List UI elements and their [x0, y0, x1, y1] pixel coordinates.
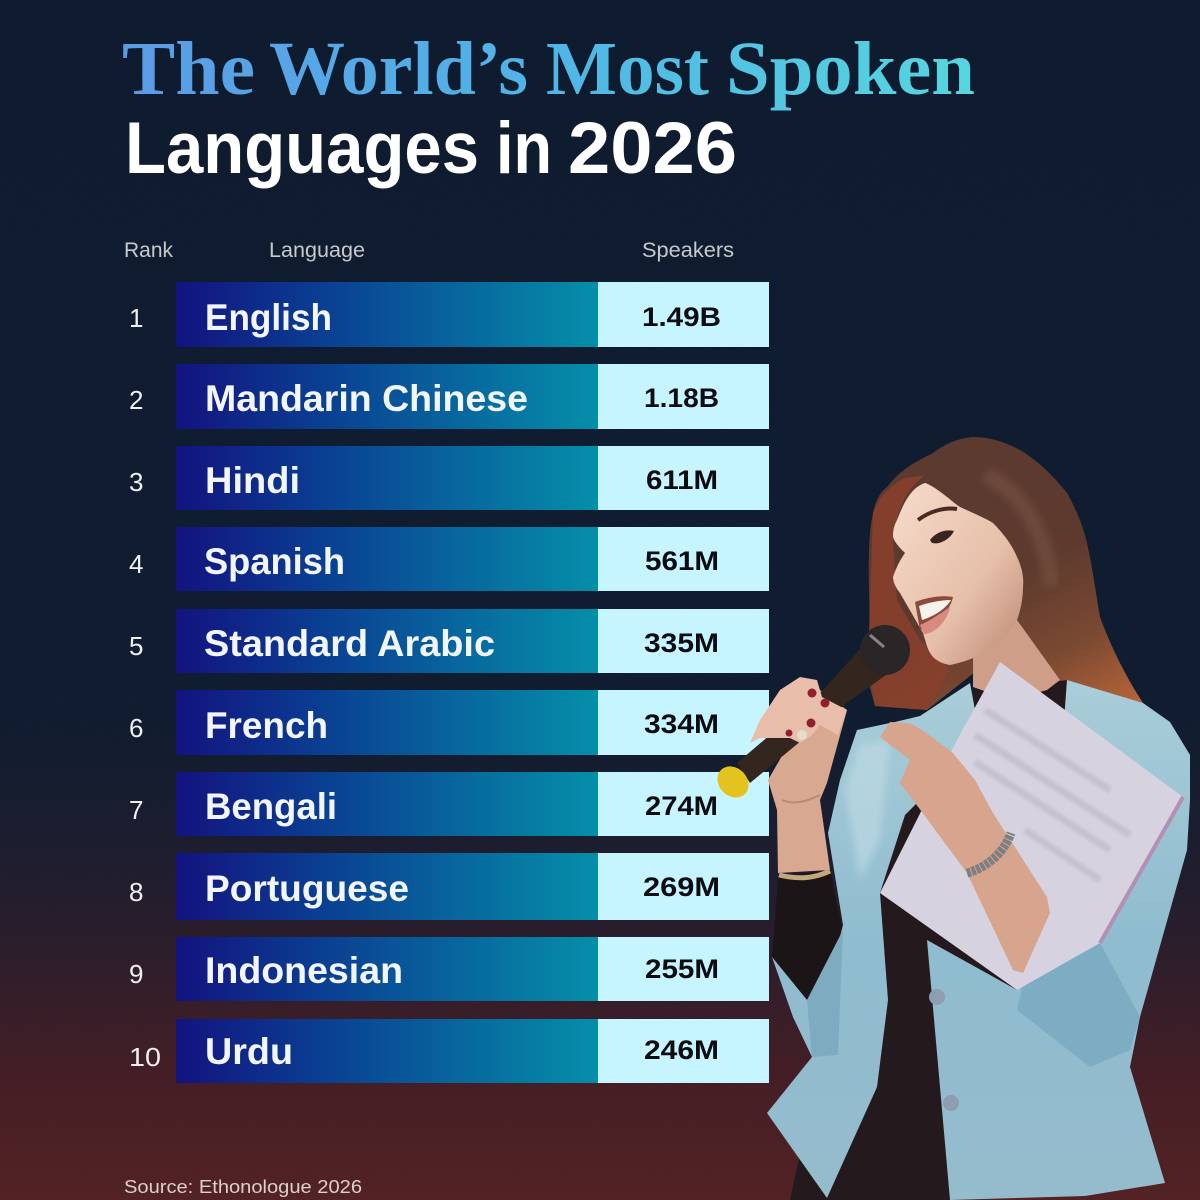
notebook handwriting [975, 710, 1130, 880]
source note: Source: Ethonologue 2026 [124, 1177, 362, 1197]
row 3: Hindi: Hindi [205, 460, 300, 501]
row 4: Spanish: 4 [129, 549, 143, 579]
table header: Speakers [642, 239, 734, 262]
row 5: Standard Arabic [129, 609, 769, 673]
row 1: English: 1 [129, 303, 143, 333]
title [122, 27, 975, 189]
row 2: Mandarin Chinese: 2 [129, 385, 143, 415]
right hand and forearm [880, 722, 1050, 973]
row 6: French [129, 690, 769, 755]
right wrist bracelet [967, 833, 1011, 873]
row 6: French: French [205, 705, 328, 746]
row 7: Bengali: 7 [129, 795, 143, 825]
row 10: Urdu: Urdu [205, 1031, 293, 1072]
row 9: Indonesian: 9 [129, 959, 143, 989]
row 4: Spanish: 561M [645, 546, 719, 576]
row 10: Urdu: 10 [129, 1042, 161, 1072]
row 1: English: 1.49B [642, 302, 721, 332]
row 9: Indonesian: 255M [645, 954, 719, 984]
title: in [496, 108, 552, 189]
row 3: Hindi: 3 [129, 467, 143, 497]
row 8: Portuguese: 269M [643, 872, 720, 902]
left lapel highlight [845, 740, 890, 880]
row 2: Mandarin Chinese: 1.18B [644, 383, 719, 413]
jacket left panel [767, 683, 975, 1198]
jacket right panel [927, 680, 1190, 1200]
title: The [122, 27, 255, 111]
right sleeve shade [1017, 913, 1140, 1067]
jacket buttons [929, 989, 959, 1111]
row 7: Bengali [129, 772, 769, 836]
notebook [880, 662, 1183, 990]
title: 2026 [568, 108, 737, 189]
row 5: Standard Arabic: 5 [129, 631, 143, 661]
row 8: Portuguese [129, 853, 769, 920]
left sleeve cuff shade [807, 930, 843, 1057]
table header [124, 239, 734, 262]
row 5: Standard Arabic: 335M [644, 628, 719, 658]
left black sleeve [772, 870, 843, 1000]
face [893, 483, 1023, 665]
title: Most [546, 27, 709, 111]
row 8: Portuguese: Portuguese [205, 868, 409, 909]
row 1: English [129, 282, 769, 347]
eye and brow [918, 508, 957, 543]
row 2: Mandarin Chinese [129, 364, 769, 429]
title: Languages [125, 108, 479, 189]
hair left side [868, 475, 950, 710]
row 8: Portuguese: 8 [129, 877, 143, 907]
row 4: Spanish [129, 527, 769, 591]
woman speaking with microphone and notebook [711, 437, 1190, 1200]
black top [790, 680, 1068, 1200]
table header: Language [269, 239, 365, 262]
microphone [711, 625, 910, 804]
row 10: Urdu: 246M [644, 1035, 719, 1065]
row 2: Mandarin Chinese: Mandarin Chinese [205, 378, 528, 419]
row 7: Bengali: Bengali [205, 786, 337, 827]
notebook spiral edge [1100, 797, 1183, 943]
row 5: Standard Arabic: Standard Arabic [204, 623, 495, 664]
table header: Rank [124, 239, 173, 262]
wrist crease [782, 795, 820, 803]
row 1: English: English [205, 297, 332, 338]
nails [786, 688, 830, 740]
title: Spoken [726, 27, 975, 111]
hair [868, 437, 1143, 710]
left wrist bracelet [779, 871, 830, 878]
row 10: Urdu [129, 1019, 769, 1083]
title: World’s [269, 27, 528, 111]
left fingers over microphone [750, 677, 847, 743]
mouth [915, 596, 953, 634]
row 9: Indonesian [129, 937, 769, 1001]
hair sheen [985, 475, 1052, 585]
row 7: Bengali: 274M [645, 791, 718, 821]
row 9: Indonesian: Indonesian [205, 950, 403, 991]
row 6: French: 334M [644, 709, 719, 739]
row 3: Hindi: 611M [646, 465, 718, 495]
row 6: French: 6 [129, 713, 143, 743]
row 3: Hindi [129, 446, 769, 510]
neck [973, 620, 1060, 700]
row 4: Spanish: Spanish [204, 541, 345, 582]
left palm [768, 690, 847, 873]
